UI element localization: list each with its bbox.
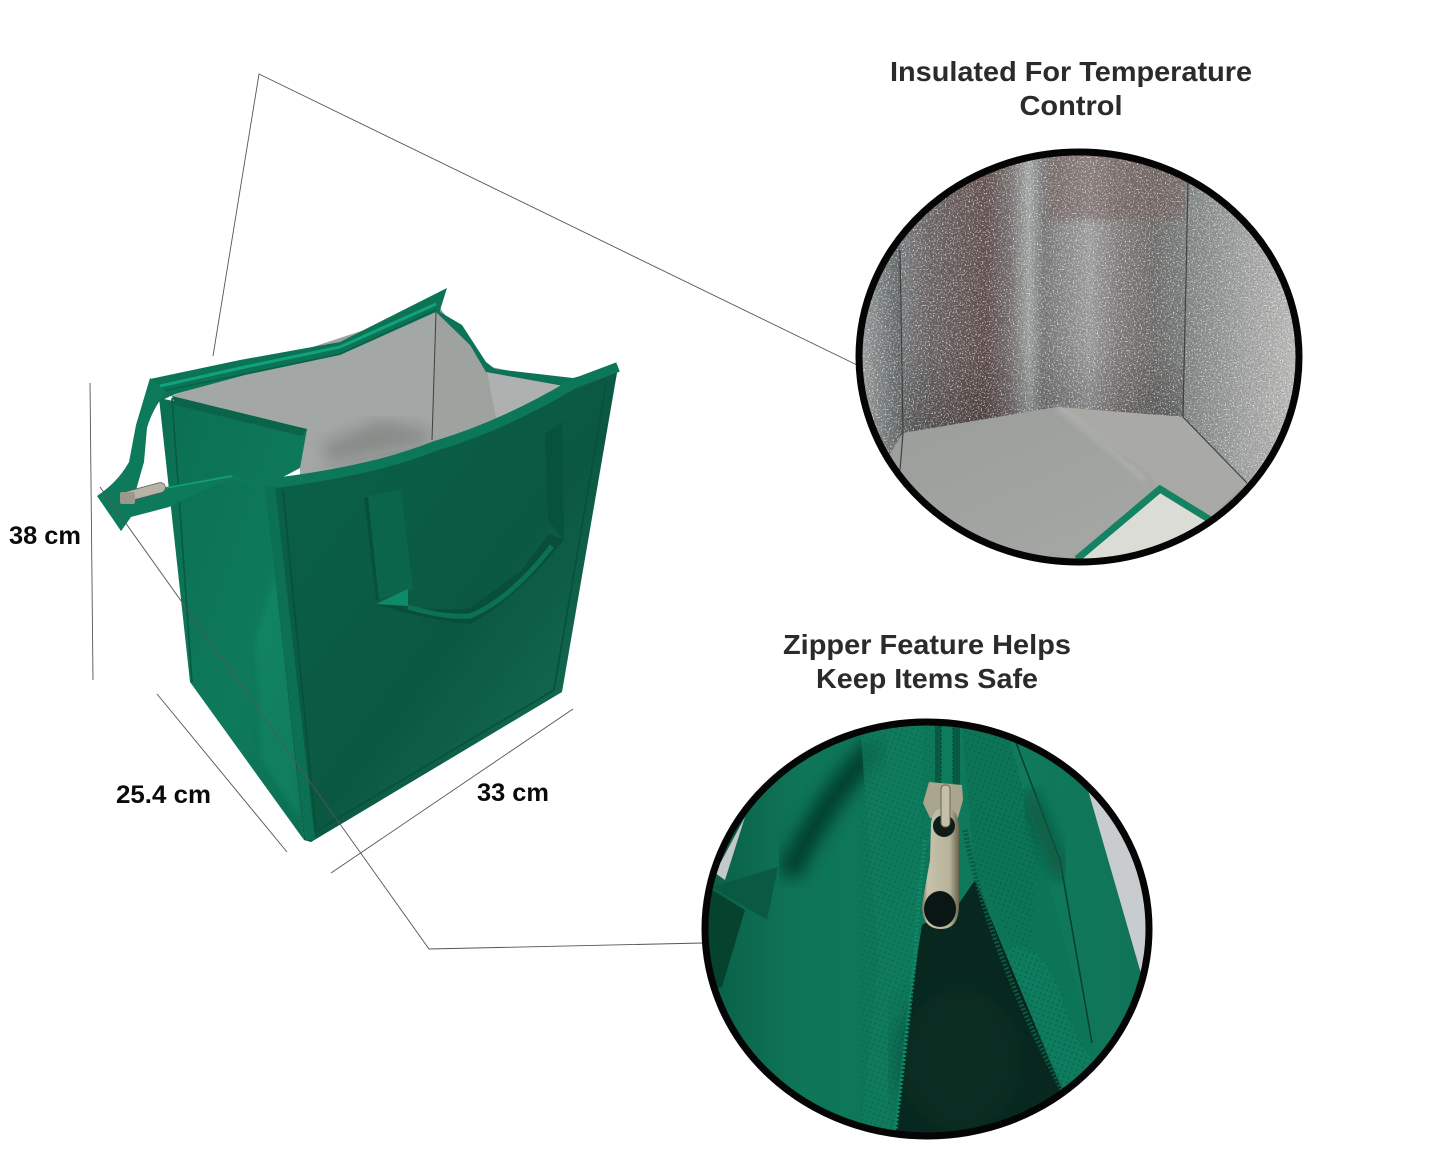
- heading: zipper: Zipper Feature Helps: [783, 629, 1071, 660]
- dimension line: width: [331, 709, 573, 873]
- dimension line: height: [90, 383, 93, 680]
- zipper slider: [120, 481, 167, 504]
- zipper slider and pull: [922, 782, 963, 929]
- bag corner: green trim: [1077, 489, 1212, 570]
- heading: insulation: Control: [1020, 90, 1122, 121]
- label: depth: 25.4 cm: [116, 781, 211, 809]
- product photo: green insulated bag: [97, 288, 618, 842]
- zipper teeth: [895, 840, 925, 1135]
- white background glimpses: [1088, 792, 1146, 972]
- callout lines: insulation: [213, 74, 857, 365]
- heading: zipper: Keep Items Safe: [816, 663, 1038, 694]
- left dark fold and handle tab: [702, 745, 878, 990]
- left foil wall: [867, 244, 900, 454]
- detail circle: zipper close-up: [702, 719, 1160, 1139]
- dark bag opening: [895, 880, 1062, 1139]
- side panel: [159, 396, 307, 840]
- callout lines: zipper: [100, 487, 703, 949]
- label: height: 38 cm: [9, 522, 81, 550]
- interior foil lining: [165, 306, 575, 480]
- heading: insulation: Insulated For Temperature: [890, 56, 1252, 87]
- detail circle: foil insulation: [856, 149, 1310, 570]
- back rim with zipper: [150, 288, 618, 402]
- right foil wall: [1184, 182, 1296, 483]
- foil texture: [856, 149, 1302, 489]
- back foil wall: [900, 156, 1186, 438]
- bag handle: [364, 422, 564, 624]
- foil floor: [890, 407, 1174, 558]
- right fabric folds: [962, 725, 1095, 1087]
- dimension line: depth: [157, 694, 287, 852]
- wall seams: [900, 183, 1247, 483]
- label: width: 33 cm: [477, 779, 549, 807]
- loose zipper flap: [97, 378, 266, 531]
- fabric light band: [861, 732, 887, 790]
- front panel: [265, 367, 618, 842]
